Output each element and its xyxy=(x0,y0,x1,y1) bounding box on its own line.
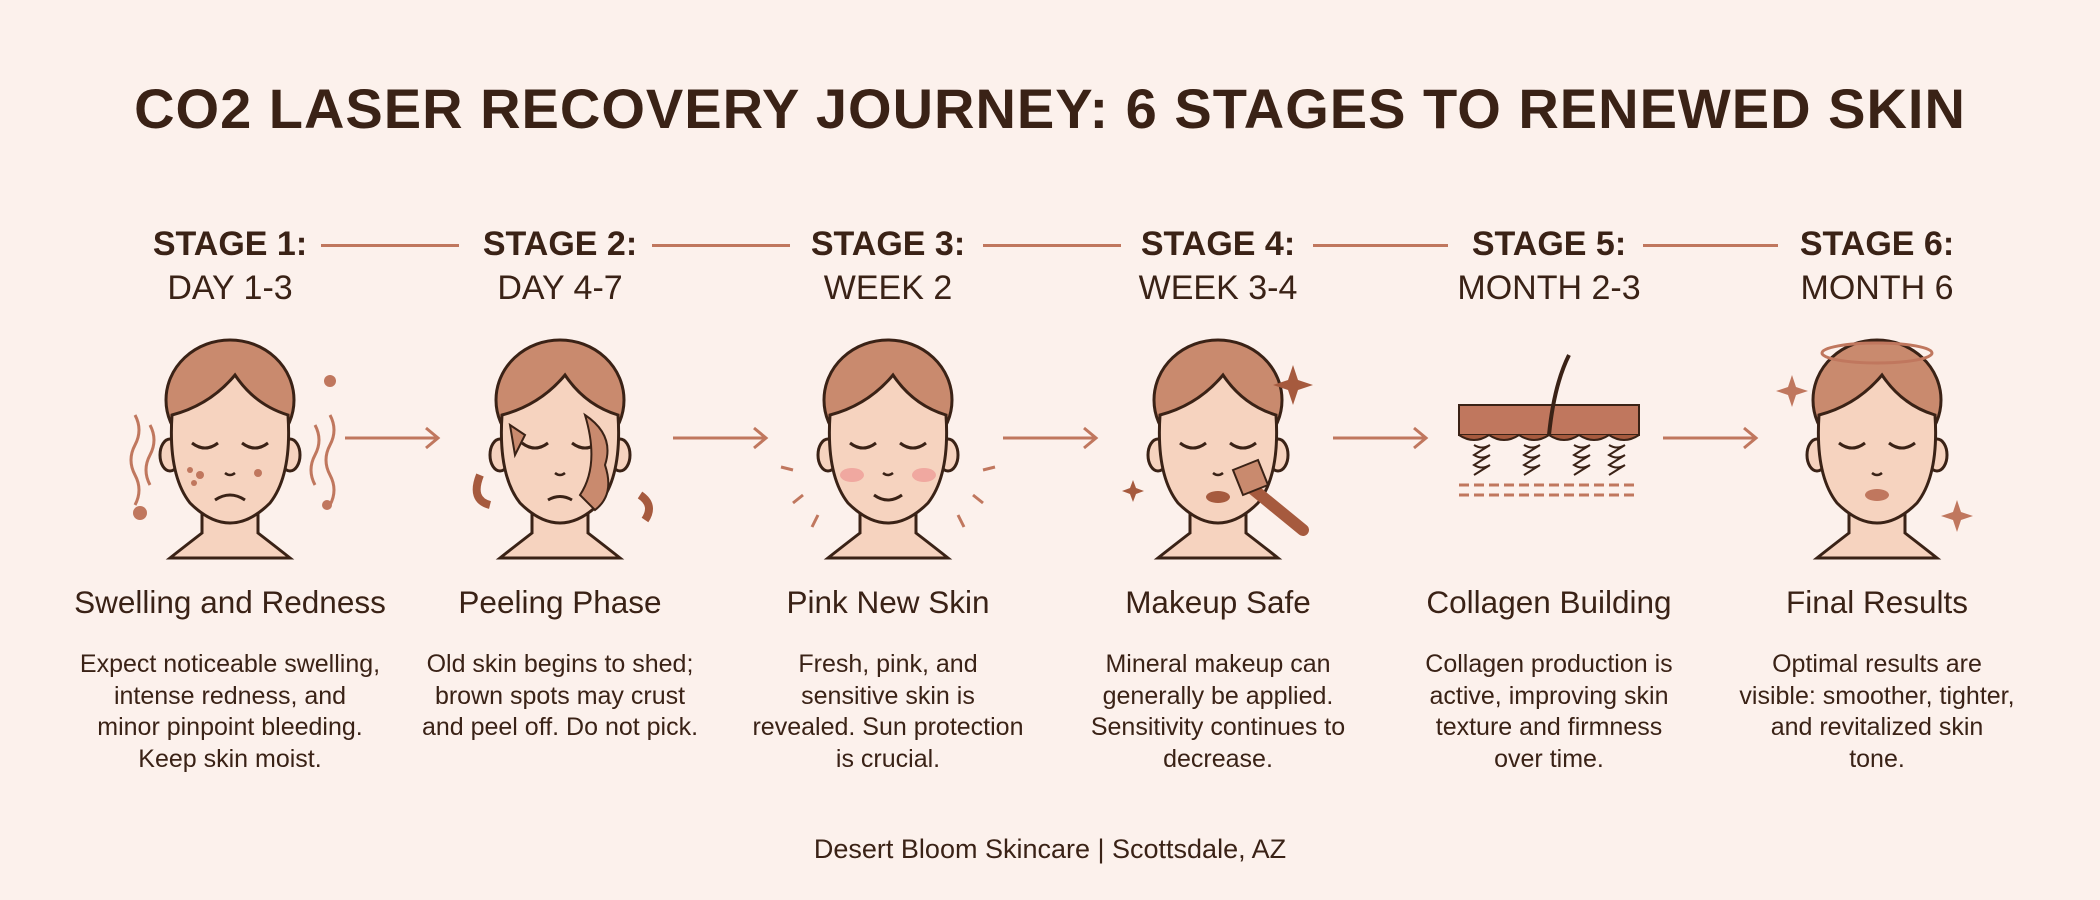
title: CO2 LASER RECOVERY JOURNEY: 6 STAGES TO RENEWED SKIN xyxy=(134,77,1966,140)
stage1 xyxy=(131,340,336,558)
stage2 xyxy=(477,340,649,558)
stage labels and descriptions: Sensitivity continues to xyxy=(1091,713,1345,741)
stage labels and descriptions: Swelling and Redness xyxy=(74,584,386,620)
stage labels and descriptions: revealed. Sun protection xyxy=(752,713,1024,741)
stage labels and descriptions: Keep skin moist. xyxy=(138,744,322,772)
stage labels and descriptions: Collagen Building xyxy=(1426,584,1672,620)
stage3 xyxy=(781,340,995,558)
stage headings: DAY 1-3 xyxy=(167,269,293,307)
stage labels and descriptions: intense redness, and xyxy=(114,682,346,710)
stage headings: STAGE 4: xyxy=(1141,225,1295,263)
stage labels and descriptions: Pink New Skin xyxy=(786,584,990,620)
stage labels and descriptions: active, improving skin xyxy=(1430,682,1668,710)
stage labels and descriptions: visible: smoother, tighter, xyxy=(1739,682,2015,710)
stage labels and descriptions xyxy=(74,584,2015,772)
stage headings xyxy=(153,225,1954,307)
stage labels and descriptions: minor pinpoint bleeding. xyxy=(97,713,363,741)
stage labels and descriptions: and revitalized skin xyxy=(1771,713,1983,741)
stage headings: MONTH 6 xyxy=(1800,269,1954,307)
stage headings: STAGE 6: xyxy=(1800,225,1954,263)
stage labels and descriptions: Fresh, pink, and xyxy=(798,650,978,678)
illustrations xyxy=(130,338,1973,560)
stage4 xyxy=(1122,340,1313,558)
stage labels and descriptions: texture and firmness xyxy=(1436,713,1662,741)
stage labels and descriptions: brown spots may crust xyxy=(435,682,685,710)
stage headings: STAGE 3: xyxy=(811,225,965,263)
stage labels and descriptions: decrease. xyxy=(1163,744,1273,772)
stage labels and descriptions: Optimal results are xyxy=(1772,650,1982,678)
stage headings: STAGE 2: xyxy=(483,225,637,263)
stage headings: WEEK 3-4 xyxy=(1139,269,1297,307)
stage labels and descriptions: over time. xyxy=(1494,744,1604,772)
stage labels and descriptions: Expect noticeable swelling, xyxy=(80,650,380,678)
stage labels and descriptions: generally be applied. xyxy=(1103,682,1333,710)
stage labels and descriptions: Collagen production is xyxy=(1425,650,1673,678)
stage headings: WEEK 2 xyxy=(824,269,952,307)
stage6 xyxy=(1776,340,1973,558)
stage labels and descriptions: sensitive skin is xyxy=(801,682,975,710)
stage labels and descriptions: Makeup Safe xyxy=(1125,584,1311,620)
arrows xyxy=(345,428,1756,448)
stage labels and descriptions: Final Results xyxy=(1786,584,1968,620)
stage labels and descriptions: Old skin begins to shed; xyxy=(427,650,693,678)
stage headings: STAGE 1: xyxy=(153,225,307,263)
stage labels and descriptions: and peel off. Do not pick. xyxy=(422,713,698,741)
stage headings: DAY 4-7 xyxy=(497,269,623,307)
stage headings: STAGE 5: xyxy=(1472,225,1626,263)
footer: Desert Bloom Skincare | Scottsdale, AZ xyxy=(814,834,1286,864)
stage labels and descriptions: tone. xyxy=(1849,744,1905,772)
stage5 skin section xyxy=(1459,355,1639,495)
stage labels and descriptions: is crucial. xyxy=(836,744,940,772)
stage labels and descriptions: Mineral makeup can xyxy=(1105,650,1331,678)
stage headings: MONTH 2-3 xyxy=(1457,269,1641,307)
stage labels and descriptions: Peeling Phase xyxy=(458,584,662,620)
